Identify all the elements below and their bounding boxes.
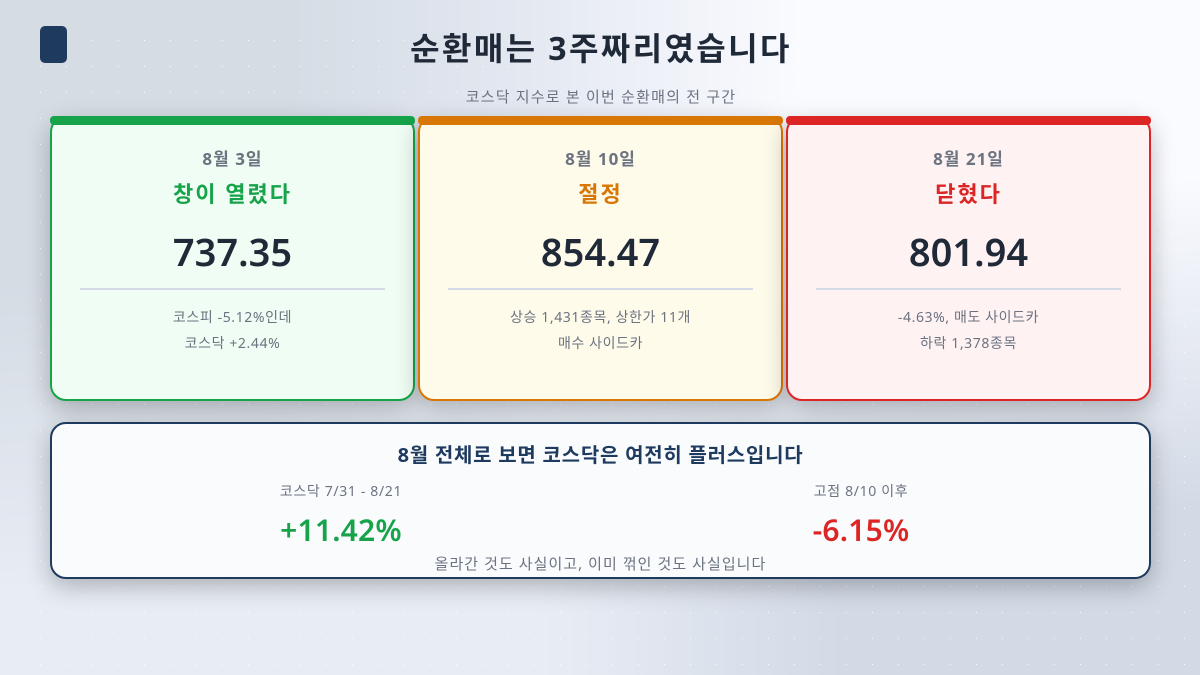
note line 1: -4.63%, 매도 사이드카 bbox=[898, 308, 1039, 327]
right metric label: 고점 8/10 이후 bbox=[814, 482, 908, 501]
note line 2: 하락 1,378종목 bbox=[920, 334, 1017, 353]
left metric value: +11.42% bbox=[280, 509, 402, 550]
logo badge bbox=[40, 26, 67, 63]
note line 1: 상승 1,431종목, 상한가 11개 bbox=[510, 308, 691, 327]
summary heading: 8월 전체로 보면 코스닥은 여전히 플러스입니다 bbox=[398, 441, 803, 468]
note line 2: 코스닥 +2.44% bbox=[185, 334, 280, 353]
accent bar amber bbox=[418, 116, 783, 125]
panel: 8월 10일 bbox=[418, 116, 783, 401]
value: 737.35 bbox=[173, 226, 292, 278]
date: 8월 10일 bbox=[565, 147, 636, 170]
value: 854.47 bbox=[541, 226, 660, 278]
accent bar green bbox=[50, 116, 415, 125]
heading: 절정 bbox=[578, 179, 623, 209]
title: 순환매는 3주짜리였습니다 bbox=[410, 27, 792, 70]
panel: summary bbox=[50, 422, 1151, 579]
right metric value: -6.15% bbox=[813, 509, 909, 550]
note line 2: 매수 사이드카 bbox=[558, 334, 643, 353]
heading: 창이 열렸다 bbox=[173, 179, 292, 209]
date: 8월 3일 bbox=[202, 147, 263, 170]
note line 1: 코스피 -5.12%인데 bbox=[173, 308, 292, 327]
value: 801.94 bbox=[909, 226, 1028, 278]
heading: 닫혔다 bbox=[935, 179, 1002, 209]
left metric label: 코스닥 7/31 - 8/21 bbox=[280, 482, 402, 501]
date: 8월 21일 bbox=[933, 147, 1004, 170]
subtitle: 코스닥 지수로 본 이번 순환매의 전 구간 bbox=[466, 87, 736, 107]
closing note: 올라간 것도 사실이고, 이미 꺾인 것도 사실입니다 bbox=[435, 554, 766, 574]
panel: 8월 21일 bbox=[786, 116, 1151, 401]
panel: 8월 3일 bbox=[50, 116, 415, 401]
accent bar red bbox=[786, 116, 1151, 125]
